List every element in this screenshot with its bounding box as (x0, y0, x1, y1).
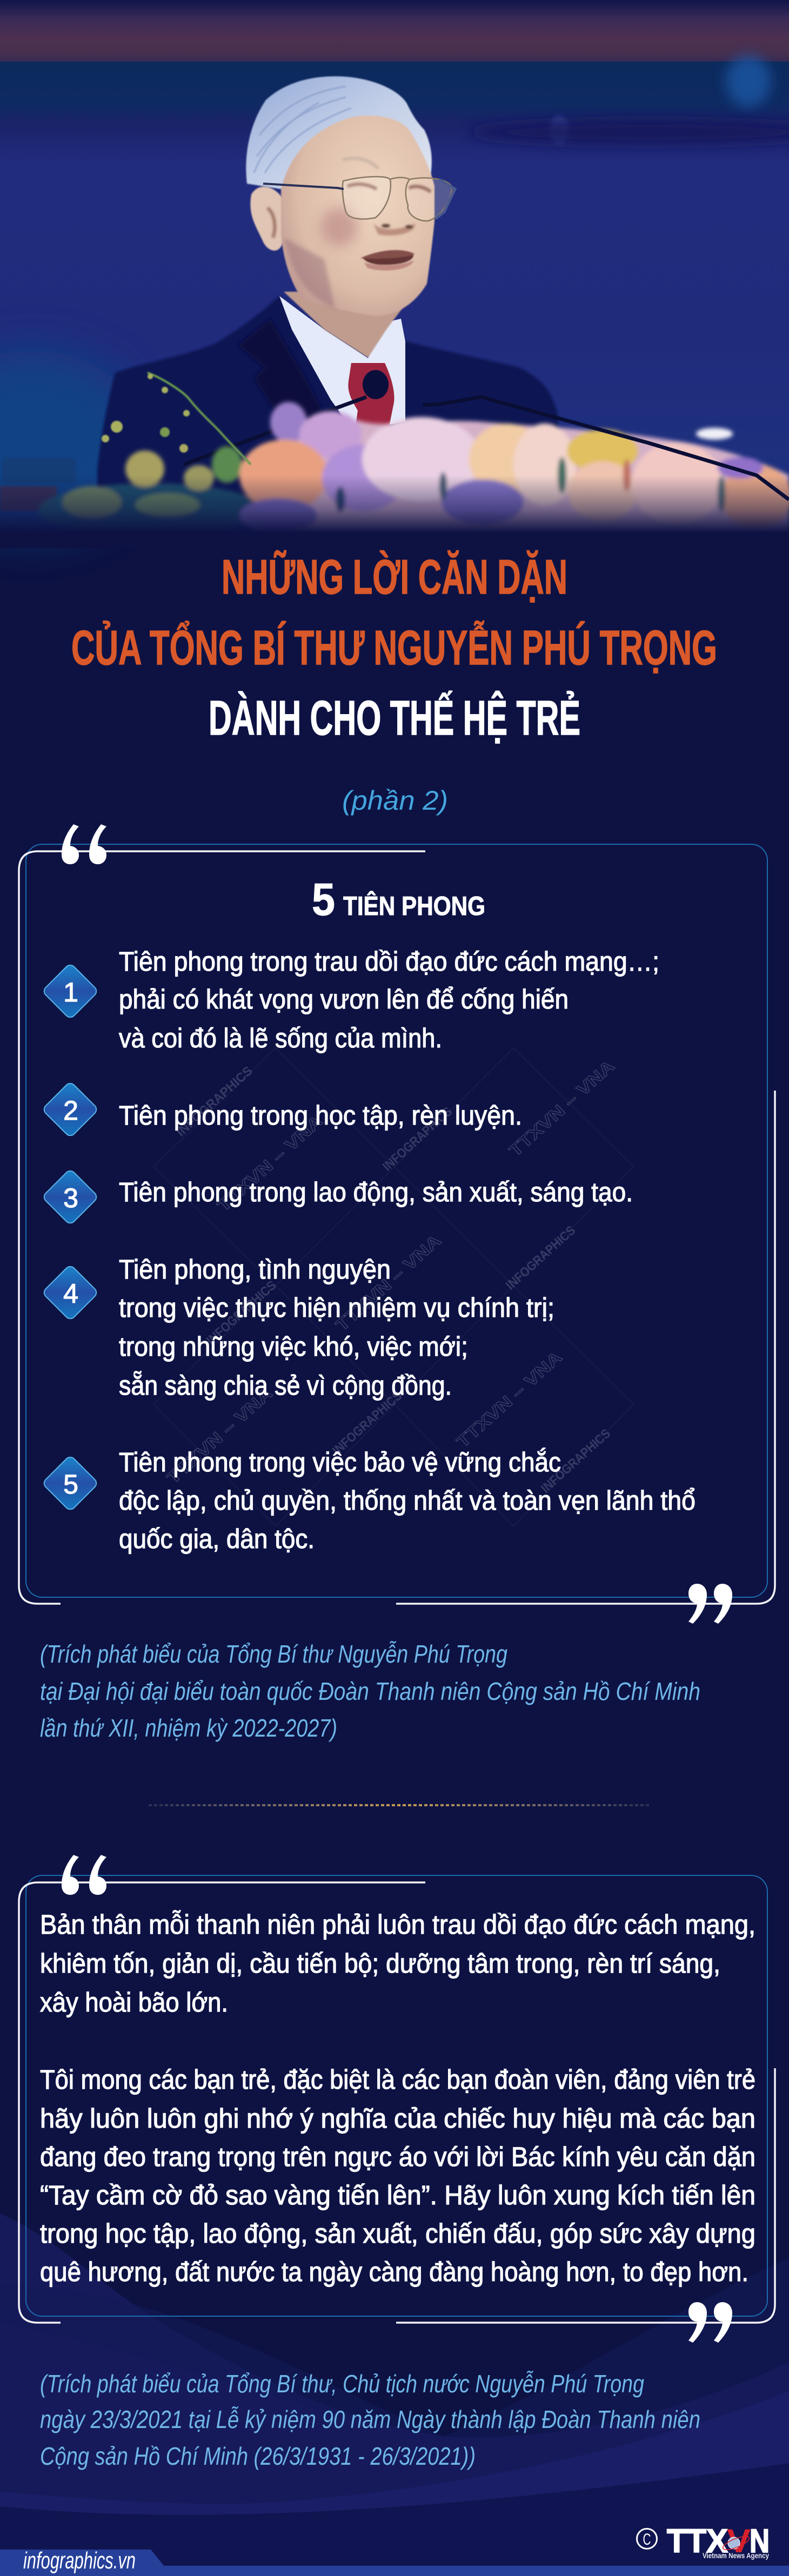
item 5: Tiên phong trong việc bảo vệ vững chắc (119, 1447, 561, 1477)
cheek (321, 207, 358, 246)
face (281, 116, 434, 316)
quote paragraph 1 (40, 1909, 755, 2017)
suit (97, 296, 562, 519)
footer bar: infographics.vn (23, 2547, 136, 2574)
podium items at left (0, 458, 76, 511)
agency letters: TTX (667, 2523, 728, 2559)
item 5: quốc gia, dân tộc. (119, 1524, 315, 1554)
nose (373, 223, 415, 236)
tie (348, 363, 394, 438)
source note 1: lần thứ XII, nhiệm kỳ 2022-2027) (40, 1714, 337, 1742)
open quote mark (62, 1855, 106, 1895)
panel: 5 tiên phong (19, 824, 775, 1624)
fade base (0, 532, 789, 548)
watermark pattern: INFOGRAPHICS (503, 1223, 578, 1293)
close quote mark (688, 1584, 732, 1624)
open quote mark (62, 824, 106, 864)
quote paragraph 1: xây hoài bão lớn. (40, 1987, 228, 2017)
heading: 5 tiên phong: TIÊN PHONG (343, 891, 485, 921)
watermark pattern: TTXVN – VNA (213, 1112, 326, 1215)
heading: 5 tiên phong: 5 (312, 874, 335, 925)
hair (246, 76, 432, 189)
item 3: 3 (63, 1183, 78, 1213)
panel: quote 2 (19, 1855, 775, 2343)
item 3: Tiên phong trong lao động, sản xuất, sáng tạo. (119, 1177, 633, 1207)
globe (721, 2534, 751, 2552)
lapel shadow (238, 319, 351, 508)
item 5: độc lập, chủ quyền, thống nhất và toàn vẹn lãnh thổ (119, 1485, 696, 1516)
blue inner frame (26, 844, 767, 1597)
watermark pattern: TTXVN – VNA (505, 1057, 618, 1160)
item 4: sẵn sàng chia sẻ vì cộng đồng. (119, 1370, 452, 1401)
item 4: Tiên phong, tình nguyện (119, 1254, 391, 1284)
watermark pattern: INFOGRAPHICS (330, 1388, 405, 1458)
quote paragraph 2 (40, 2064, 755, 2287)
item 4: trong việc thực hiện nhiệm vụ chính trị; (119, 1293, 554, 1323)
brows and eyes (343, 158, 431, 192)
left microphone cable (184, 370, 389, 465)
hair streaks (254, 86, 351, 173)
watermark pattern: INFOGRAPHICS (538, 1426, 613, 1496)
neck (284, 292, 403, 358)
background curves at the bottom (0, 2214, 789, 2576)
agency letters: N (750, 2523, 770, 2559)
agency letters: V (727, 2523, 751, 2559)
item 5 (42, 1447, 696, 1554)
logo: TTXVN (637, 2523, 770, 2560)
jaw shadow (284, 238, 335, 309)
photo backdrop (0, 0, 789, 535)
fade to page background (0, 475, 789, 533)
flowers (38, 402, 789, 537)
white outer frame (19, 851, 775, 1604)
watermark pattern: TTXVN – VNA (332, 1231, 445, 1335)
agency letters (667, 2523, 770, 2559)
head (246, 76, 455, 316)
item 1 (42, 946, 659, 1053)
close quote mark (688, 2302, 732, 2343)
item 1: 1 (63, 977, 78, 1007)
ear (250, 187, 284, 251)
item 1: phải có khát vọng vươn lên để cống hiến (119, 984, 569, 1014)
quote paragraph 1: Bản thân mỗi thanh niên phải luôn trau dồi đạo đức cách mạng, (40, 1909, 755, 1940)
heading: 5 tiên phong (312, 874, 485, 925)
hero photo: speaker at podium with flowers (0, 0, 789, 548)
quote paragraph 2: hãy luôn luôn ghi nhớ ý nghĩa của chiếc huy hiệu mà các bạn (40, 2103, 755, 2134)
item 2: 2 (63, 1095, 78, 1126)
tagline: Vietnam News Agency (703, 2551, 769, 2560)
title: DÀNH CHO THẾ HỆ TRẺ (209, 690, 580, 745)
item 5: 5 (63, 1469, 78, 1499)
watermark pattern (153, 1048, 633, 1526)
source note 1: (Trích phát biểu của Tổng Bí thư Nguyễn Phú Trọng (40, 1640, 507, 1668)
source note 2: (Trích phát biểu của Tổng Bí thư, Chủ tịch nước Nguyễn Phú Trọng (40, 2370, 644, 2398)
footer bar (0, 2547, 789, 2576)
item 4 (42, 1254, 554, 1401)
mouth (360, 250, 414, 271)
quote paragraph 2: đang đeo trang trọng trên ngực áo với lời Bác kính yêu căn dặn (40, 2142, 755, 2172)
watermark pattern: TTXVN – VNA (163, 1384, 276, 1488)
subtitle: part 2: (phần 2) (342, 785, 448, 816)
ear shadow (268, 208, 275, 238)
shirt collar (279, 296, 405, 432)
divider (149, 1804, 649, 1806)
source note 1 (40, 1640, 700, 1742)
item 1: và coi đó là lẽ sống của mình. (119, 1023, 442, 1053)
orchid stem (102, 373, 251, 465)
watermark pattern: INFOGRAPHICS (204, 1278, 279, 1348)
right microphone cable (423, 397, 789, 500)
item 3 (42, 1169, 633, 1225)
source note 2 (40, 2370, 700, 2470)
copyright mark: C (643, 2531, 651, 2548)
quote paragraph 1: khiêm tốn, giản dị, cầu tiến bộ; dưỡng tâm trong, rèn trí sáng, (40, 1948, 720, 1979)
item 4: trong những việc khó, việc mới; (119, 1331, 468, 1362)
title: NHỮNG LỜI CĂN DẶN (222, 550, 567, 604)
item 1: Tiên phong trong trau dồi đạo đức cách mạng…; (119, 946, 659, 977)
blue inner frame (26, 1875, 767, 2316)
white outer frame (19, 1882, 775, 2323)
glasses (263, 177, 455, 221)
watermark pattern: INFOGRAPHICS (173, 1064, 256, 1139)
quote paragraph 2: “Tay cầm cờ đỏ sao vàng tiến lên”. Hãy luôn xung kích tiến lên (40, 2180, 755, 2210)
item 4: 4 (63, 1279, 78, 1309)
source note 2: Cộng sản Hồ Chí Minh (26/3/1931 - 26/3/2021)) (40, 2442, 476, 2470)
quote paragraph 2: trong học tập, lao động, sản xuất, chiến đấu, góp sức xây dựng (40, 2218, 755, 2249)
item 2 (42, 1081, 522, 1138)
watermark pattern: INFOGRAPHICS (380, 1104, 455, 1174)
watermark pattern: TTXVN – VNA (453, 1348, 566, 1451)
item 2: Tiên phong trong học tập, rèn luyện. (119, 1100, 522, 1131)
title (71, 550, 717, 745)
copyright mark (637, 2529, 657, 2548)
